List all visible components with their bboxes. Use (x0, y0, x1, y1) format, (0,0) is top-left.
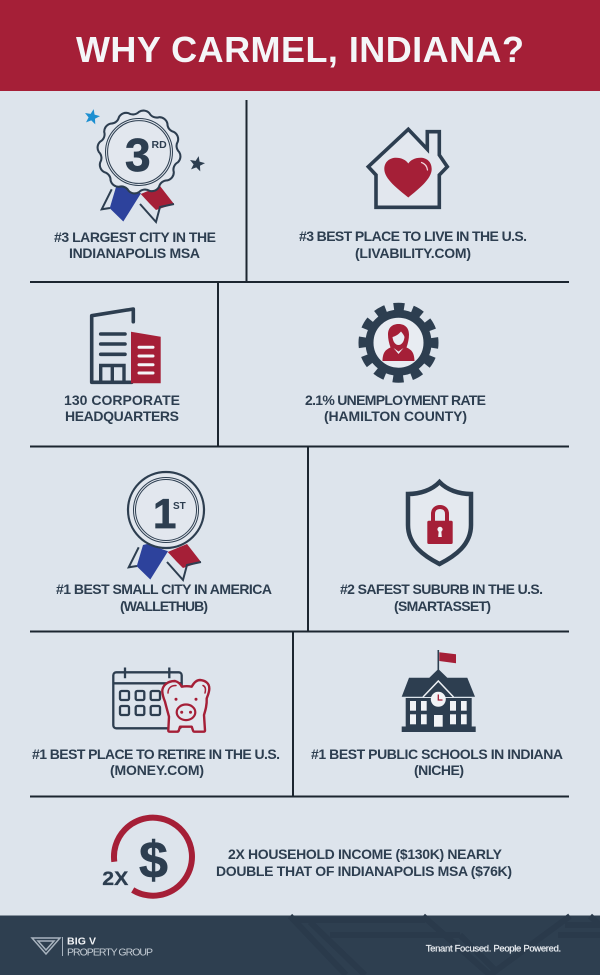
icon: padlock (427, 507, 453, 544)
panel: best public schools (311, 650, 563, 778)
panel: household income (102, 818, 512, 896)
label: household income (216, 846, 512, 879)
logo (32, 936, 153, 958)
label: best place to live (299, 228, 527, 261)
rank suffix: RD (152, 139, 167, 151)
label: best public schools: (NICHE) (414, 762, 464, 778)
icon: shield with lock (408, 482, 471, 564)
title banner (0, 0, 600, 91)
label: best small city: #1 BEST SMALL CITY IN AMERICA (56, 581, 272, 597)
panel: corporate headquarters (64, 309, 180, 424)
logo mark (32, 937, 62, 956)
label: unemployment rate (305, 392, 486, 424)
label: best place to live: (LIVABILITY.COM) (355, 245, 471, 261)
ribbon: red (167, 544, 201, 580)
icon: blue star (83, 108, 101, 125)
label: unemployment rate: 2.1% UNEMPLOYMENT RATE (305, 392, 486, 408)
panel: best place to retire (32, 668, 280, 778)
icon: calendar (113, 668, 182, 728)
logo wordmark: BIG V (67, 936, 96, 948)
icon: piggy bank (162, 680, 209, 732)
icon: school building (402, 650, 476, 732)
label: best small city (56, 581, 272, 614)
dollar sign: $ (139, 832, 168, 890)
multiplier: 2X (102, 868, 128, 890)
rank number: 3 (125, 129, 151, 181)
label: best place to retire: #1 BEST PLACE TO RETIRE IN THE U.S. (32, 746, 280, 762)
icon: clock (431, 692, 446, 707)
school walls (406, 698, 472, 727)
label: unemployment rate: (HAMILTON COUNTY) (324, 408, 467, 424)
ribbon: blue (102, 186, 141, 222)
label: corporate headquarters (64, 392, 180, 424)
medal disc (128, 472, 204, 548)
label: best place to retire (32, 746, 280, 778)
panel: best place to live (299, 129, 527, 261)
label: safest suburb: (SMARTASSET) (394, 598, 491, 614)
label: best public schools: #1 BEST PUBLIC SCHOOLS IN INDIANA (311, 746, 563, 762)
icon: flag (439, 652, 456, 663)
label: best small city: (WALLETHUB) (120, 598, 208, 614)
icon: gear with person (358, 302, 439, 383)
label: corporate headquarters: HEADQUARTERS (65, 408, 179, 424)
icon: 2x dollar ring (102, 818, 192, 896)
label: 3rd largest city (54, 229, 216, 261)
school roof (402, 669, 475, 697)
ribbon: blue (129, 544, 168, 580)
panel: best small city (56, 472, 272, 614)
logo: PROPERTY GROUP (67, 946, 153, 958)
rank suffix: ST (173, 501, 186, 512)
icon: office building (92, 309, 161, 383)
footer (0, 916, 600, 975)
label: safest suburb (340, 581, 543, 614)
label: 3rd largest city: INDIANAPOLIS MSA (69, 245, 200, 261)
icon: heart (384, 158, 432, 198)
label: household income: DOUBLE THAT OF INDIANAPOLIS MSA ($76K) (216, 863, 512, 879)
icon: third place rosette (83, 108, 206, 222)
ribbon: red (140, 186, 174, 222)
panel: 3rd largest city (54, 108, 216, 261)
icon: house with heart (368, 129, 447, 207)
icon: dark star (188, 155, 206, 172)
label: safest suburb: #2 SAFEST SUBURB IN THE U.S. (340, 581, 543, 597)
tagline: Tenant Focused. People Powered. (426, 944, 561, 954)
school windows (410, 701, 467, 727)
title: WHY CARMEL, INDIANA? (76, 29, 524, 70)
rosette badge (98, 111, 180, 193)
icon: person (382, 324, 414, 361)
rank number: 1 (153, 490, 176, 537)
label: best place to retire: (MONEY.COM) (110, 762, 204, 778)
icon: calendar and piggy bank (113, 668, 209, 732)
label: household income: 2X HOUSEHOLD INCOME ($130K) NEARLY (228, 846, 503, 862)
label: corporate headquarters: 130 CORPORATE (64, 392, 180, 408)
icon: first place medal (128, 472, 204, 580)
panel: unemployment rate (305, 302, 486, 424)
panel: safest suburb (340, 482, 543, 614)
label: 3rd largest city: #3 LARGEST CITY IN THE (54, 229, 216, 245)
label: best public schools (311, 746, 563, 778)
label: best place to live: #3 BEST PLACE TO LIVE IN THE U.S. (299, 228, 527, 244)
